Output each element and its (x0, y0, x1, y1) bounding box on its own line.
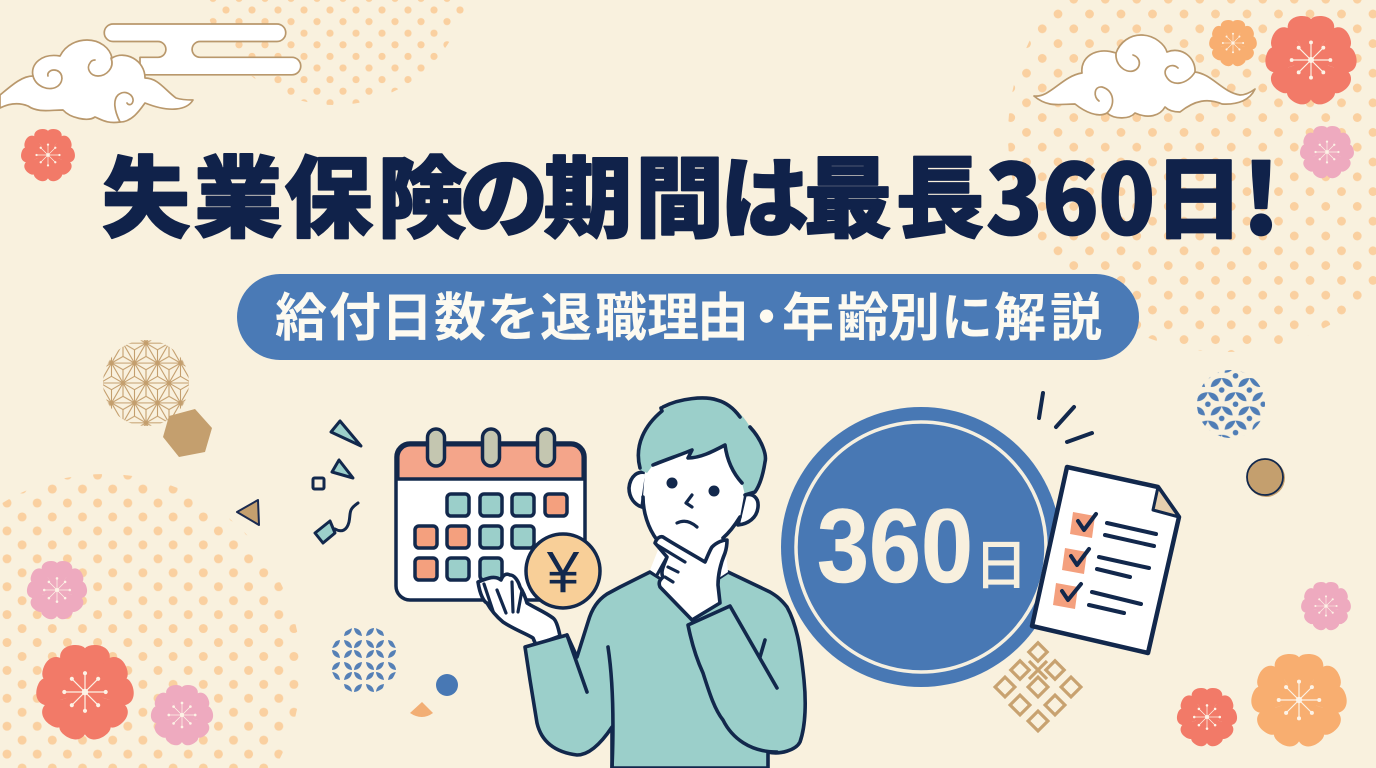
dot pattern: top right (1000, 0, 1376, 360)
blue dot (436, 674, 458, 696)
flower: pink bottom left (25, 561, 89, 622)
nose and mouth (677, 495, 697, 527)
cloud: top right (1034, 35, 1255, 118)
right sleeve (688, 606, 777, 740)
title: 失業保険の期間は最長 (102, 128, 984, 256)
blue patterned circle lower left (330, 626, 398, 694)
blue patterned circle right (1197, 370, 1265, 438)
ear left (629, 472, 647, 507)
flower: coral top right (1262, 16, 1360, 109)
eye left (666, 478, 678, 488)
flower: pink top right (1298, 126, 1356, 181)
emphasis rays (1039, 393, 1092, 442)
face (643, 445, 745, 555)
chin hand (655, 537, 727, 620)
neck (650, 545, 728, 597)
title (102, 123, 1280, 262)
eye right (708, 486, 720, 496)
tan hexagon (163, 409, 212, 457)
subtitle pill: 給付日数を退職理由・年齢別に解説 (275, 276, 1102, 351)
calendar (396, 429, 585, 600)
title: 日 (1154, 129, 1243, 257)
blue seal: 360日 (781, 407, 1061, 687)
title: ! (1242, 123, 1280, 262)
checklist document (1032, 467, 1179, 653)
hair (638, 398, 765, 495)
tan dot right (1247, 459, 1285, 497)
confetti (313, 421, 361, 543)
left hand (478, 574, 560, 645)
sweater (525, 572, 805, 768)
asanoha pattern circle (103, 340, 189, 426)
flower: coral small left (19, 129, 77, 184)
flower: orange top right (1207, 20, 1259, 69)
flower: orange bottom right (1248, 654, 1350, 752)
tan triangle (237, 500, 259, 525)
ear right (738, 494, 758, 525)
blue seal: 360日: 日 (974, 521, 1028, 600)
blue seal: 360日: 360 (817, 488, 973, 605)
gold knot (995, 643, 1081, 731)
title: 360 (986, 123, 1155, 262)
flower: pink right (1299, 582, 1353, 633)
dot pattern: top left (210, 0, 464, 105)
yen coin: ¥ (546, 540, 580, 605)
orange wedge (410, 702, 433, 717)
yen coin (526, 534, 600, 608)
flower: coral bottom left (33, 645, 137, 745)
flower: pink bottom centre left (149, 685, 215, 749)
person (478, 398, 805, 768)
dot pattern: bottom left (0, 470, 310, 768)
flower: coral bottom right (1175, 688, 1239, 749)
cloud: top left (0, 24, 301, 123)
